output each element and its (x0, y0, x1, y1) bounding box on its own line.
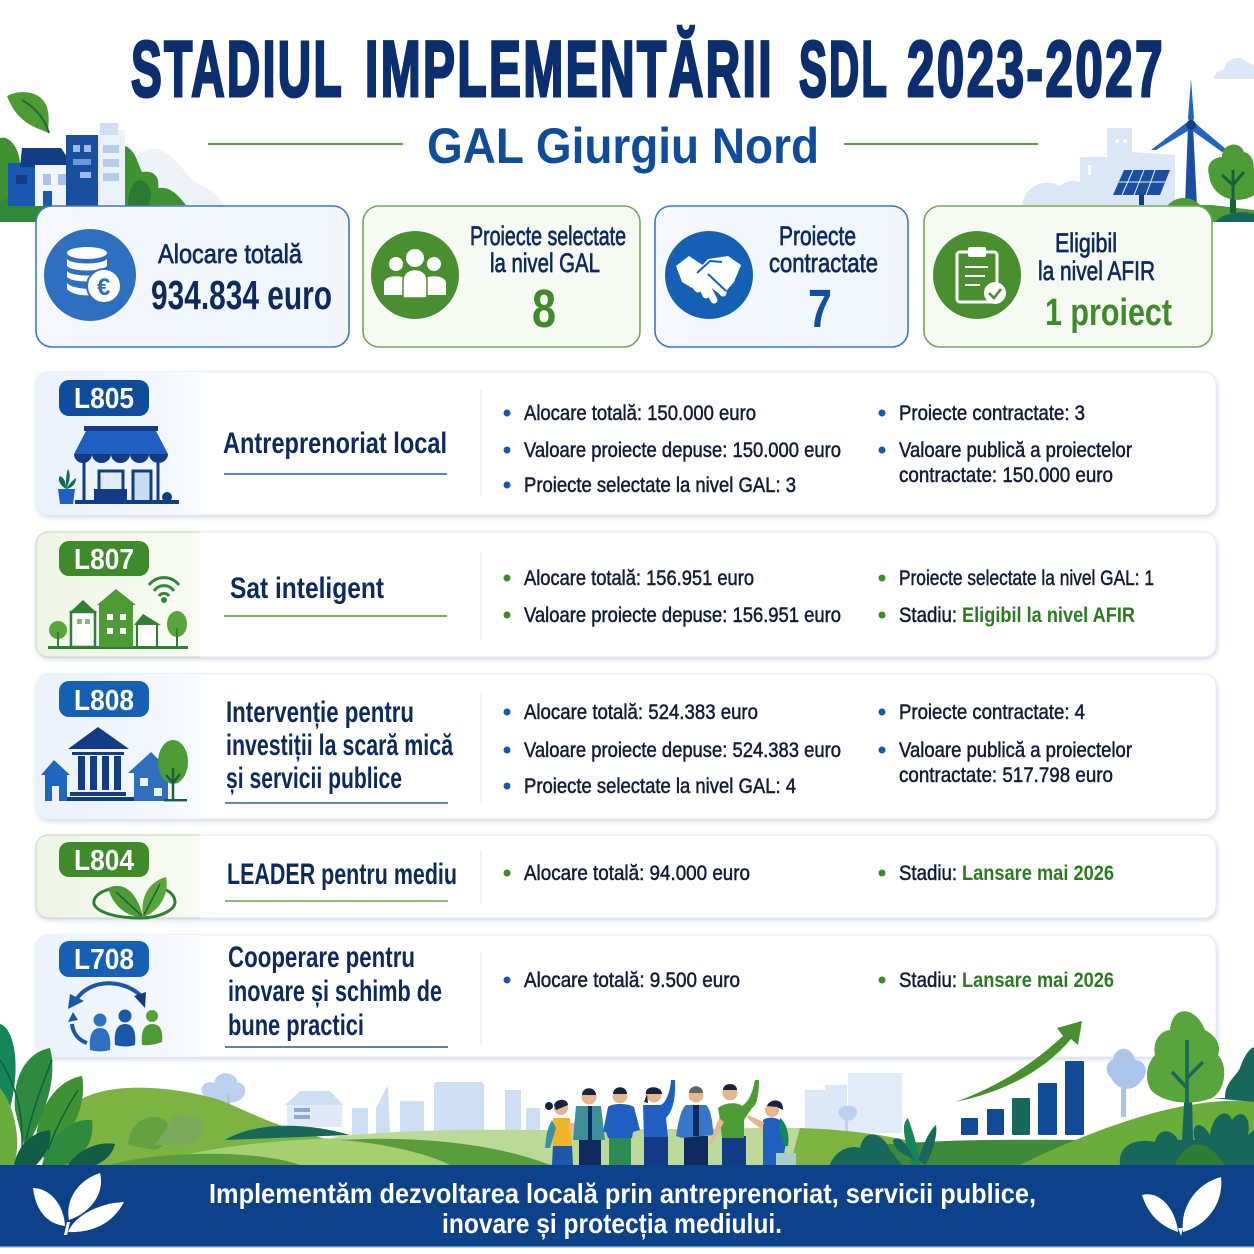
bullet: L708 status: Stadiu: (899, 969, 957, 992)
icon: handshake (665, 231, 753, 319)
person 7 (747, 1100, 796, 1165)
icon: public building and houses (41, 727, 188, 801)
icon: smart village (48, 578, 188, 649)
panel: total allocation (36, 206, 349, 347)
badge: L805 (59, 380, 149, 416)
badge: L708: L708 (74, 944, 134, 976)
bullet: L804 allocation: Alocare totală: 94.000 euro (524, 862, 750, 885)
title: SDL (799, 24, 889, 113)
panel: L807 (36, 532, 1216, 657)
bullet: L804 status: Lansare mai 2026 (962, 862, 1114, 885)
value: 7: 7 (808, 279, 832, 339)
list: L808 right (878, 701, 1132, 787)
icon: leaf sprout in ring (94, 877, 175, 918)
list: L805 right: contractate: 150.000 euro (899, 464, 1113, 487)
label: selected projects (470, 221, 626, 278)
list: L808 left: Proiecte selectate la nivel GAL: 4 (524, 775, 796, 798)
list: L807 right: Proiecte selectate la nivel GAL: 1 (899, 567, 1154, 590)
icon: white leaves right (1142, 1177, 1221, 1236)
heading: Cooperare pentru inovare și schimb de bune practici: Cooperare pentru (228, 941, 415, 974)
list: L805 left: Alocare totală: 150.000 euro (524, 402, 756, 425)
list: L805 left (504, 402, 841, 497)
badge: L807 (59, 541, 149, 576)
list: L808 left: Valoare proiecte depuse: 524.383 euro (524, 739, 841, 762)
skyline (202, 1049, 1146, 1136)
illustration: landscape with hills and skyline (60, 1049, 1254, 1165)
heading: Intervenție pentru investiții la scară mică și servicii publice: și servicii publice (226, 762, 402, 795)
badge: L805: L805 (74, 383, 134, 415)
heading: Sat inteligent: Sat inteligent (230, 572, 384, 605)
chart: growth bars (961, 1061, 1084, 1135)
footer text: inovare și protecția mediului. (442, 1208, 782, 1239)
label: AFIR eligible: Eligibil (1055, 228, 1117, 258)
list: L805 left: Valoare proiecte depuse: 150.000 euro (524, 439, 841, 462)
heading: Cooperare pentru inovare și schimb de bune practici: bune practici (228, 1009, 364, 1042)
illustration: plants bottom left (0, 1024, 115, 1165)
person 1 (545, 1100, 586, 1165)
icon: exchange and people (68, 983, 162, 1052)
panel: contracted projects (655, 206, 908, 347)
label: contracted projects (769, 221, 878, 278)
list: L807 right: Eligibil la nivel AFIR (962, 604, 1135, 627)
panel: L708 (36, 935, 1216, 1057)
list: L807 right (878, 567, 1154, 627)
illustration: tree and plants bottom right (830, 1011, 1254, 1165)
title: IMPLEMENTĂRII (365, 24, 774, 113)
icon: clipboard with check (933, 231, 1021, 319)
label: contracted projects: contractate (769, 248, 878, 278)
title: STADIUL (131, 24, 344, 113)
list: L805 right (878, 402, 1132, 487)
illustration: people group (545, 1080, 796, 1165)
person 5 (676, 1086, 714, 1165)
label: AFIR eligible (1038, 228, 1155, 286)
hills (60, 1088, 990, 1165)
person 4 (643, 1080, 675, 1165)
illustration: renewable energy top right (1022, 58, 1254, 222)
person 6 (709, 1080, 759, 1165)
list: L805 right: Valoare publică a proiectelor (899, 439, 1132, 462)
icon: group of people (371, 231, 459, 319)
heading: Intervenție pentru investiții la scară mică și servicii publice: Intervenție pentru (226, 696, 414, 729)
value: 934.834 euro: 934.834 euro (151, 272, 332, 318)
list: L808 left (504, 701, 841, 798)
panel: selected projects (363, 206, 640, 347)
heading: LEADER pentru mediu: LEADER pentru mediu (227, 858, 457, 891)
icon: coins and euro (44, 229, 136, 321)
label: contracted projects: Proiecte (779, 221, 856, 251)
person 2 (573, 1088, 605, 1165)
list: L807 right: Stadiu: (899, 604, 957, 627)
badge: L808: L808 (74, 685, 134, 717)
heading: Antreprenoriat local: Antreprenoriat local (223, 427, 447, 460)
panel: L804 (36, 835, 1216, 918)
heading: Cooperare pentru inovare și schimb de bune practici: inovare și schimb de (228, 975, 442, 1008)
badge: L808 (59, 681, 149, 717)
badge: L708 (59, 941, 149, 977)
list: L808 right: contractate: 517.798 euro (899, 764, 1113, 787)
list: L808 left: Alocare totală: 524.383 euro (524, 701, 758, 724)
bullet: L804 status (878, 862, 1114, 885)
bullet: L708 status (878, 969, 1114, 992)
bullet: L708 allocation: Alocare totală: 9.500 euro (524, 969, 740, 992)
bullet: L804 status: Stadiu: (899, 862, 957, 885)
list: L808 right: Valoare publică a proiectelor (899, 739, 1132, 762)
label: selected projects: Proiecte selectate (470, 221, 626, 251)
arrow: growth (955, 1021, 1082, 1102)
badge: L804 (59, 842, 149, 877)
list: L808 right: Proiecte contractate: 4 (899, 701, 1085, 724)
icon: leaf top left (7, 92, 49, 133)
footer text (209, 1178, 1036, 1239)
footer text: Implementăm dezvoltarea locală prin antreprenoriat, servicii publice, (209, 1178, 1036, 1209)
panel: L805 (36, 372, 1216, 515)
list: L805 left: Proiecte selectate la nivel GAL: 3 (524, 474, 796, 497)
panel: L808 (36, 674, 1216, 819)
list: L807 left: Alocare totală: 156.951 euro (524, 567, 754, 590)
badge: L804: L804 (74, 845, 134, 877)
badge: L807: L807 (74, 544, 134, 576)
heading: Intervenție pentru investiții la scară mică și servicii publice (225, 696, 453, 803)
label: total allocation: Alocare totală (158, 239, 303, 269)
label: AFIR eligible: la nivel AFIR (1038, 256, 1155, 286)
panel: AFIR eligible (924, 206, 1212, 347)
list: L805 right: Proiecte contractate: 3 (899, 402, 1085, 425)
icon: white leaves left (33, 1173, 124, 1235)
value: 8: 8 (532, 279, 556, 339)
label: selected projects: la nivel GAL (490, 248, 600, 278)
list: L807 left: Valoare proiecte depuse: 156.951 euro (524, 604, 841, 627)
value: 1 proiect: 1 proiect (1045, 292, 1172, 334)
heading: Intervenție pentru investiții la scară mică și servicii publice: investiții la scară mică (226, 729, 453, 762)
footer banner (0, 1165, 1254, 1247)
subtitle with side rules: GAL Giurgiu Nord (427, 118, 819, 174)
person 3 (603, 1087, 640, 1165)
heading: Cooperare pentru inovare și schimb de bune practici (225, 941, 448, 1047)
illustration: town top left (0, 123, 224, 222)
bullet: L708 status: Lansare mai 2026 (962, 969, 1114, 992)
icon: shop (58, 426, 179, 504)
icon: coins and euro: € (97, 274, 110, 301)
title (131, 24, 1165, 113)
list: L807 left (504, 567, 841, 627)
